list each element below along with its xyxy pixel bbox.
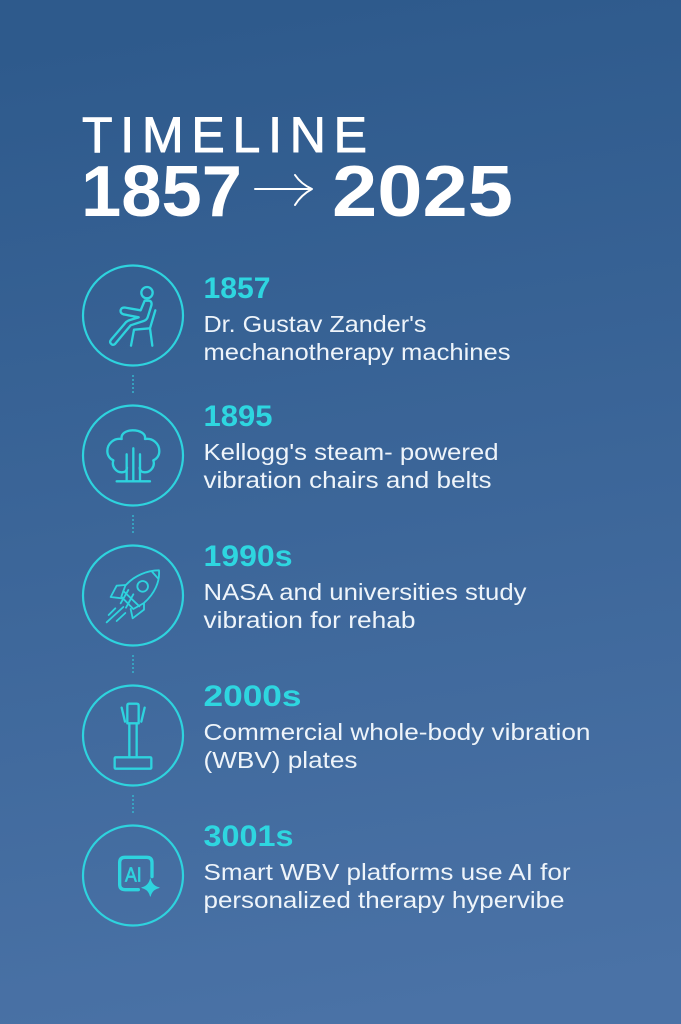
- description: (WBV) plates: [204, 747, 358, 773]
- title: [81, 107, 513, 232]
- icon: arrow: [255, 175, 312, 205]
- description: Kellogg's steam- powered: [204, 439, 498, 465]
- icon: rocket: [107, 570, 159, 622]
- description: vibration for rehab: [204, 607, 416, 633]
- description: Smart WBV platforms use AI for: [204, 859, 571, 885]
- icon: seated person: [110, 287, 155, 346]
- title: TIMELINE: [82, 107, 367, 163]
- year: 1895: [204, 400, 272, 433]
- year: 1990s: [204, 540, 292, 573]
- entry: 1857: [83, 266, 510, 366]
- description: Dr. Gustav Zander's: [204, 311, 426, 337]
- icon: AI sparkle: AI: [125, 863, 142, 886]
- year: 2000s: [204, 680, 302, 713]
- description: NASA and universities study: [204, 579, 527, 605]
- description: mechanotherapy machines: [204, 339, 510, 365]
- year: 3001s: [204, 820, 294, 853]
- description: Commercial whole-body vibration: [204, 719, 590, 745]
- entry: 3001s: [83, 820, 571, 926]
- title: 1857: [81, 152, 242, 232]
- icon: vibration plate: [115, 704, 151, 769]
- title: 2025: [332, 152, 513, 232]
- entry: 1895: [83, 400, 498, 506]
- icon: AI sparkle: [120, 857, 159, 896]
- icon: tree: [107, 430, 159, 481]
- description: vibration chairs and belts: [204, 467, 492, 493]
- description: personalized therapy hypervibe: [204, 887, 564, 913]
- entry: 1990s: [83, 540, 527, 646]
- entry: 2000s: [83, 680, 590, 786]
- year: 1857: [204, 272, 270, 305]
